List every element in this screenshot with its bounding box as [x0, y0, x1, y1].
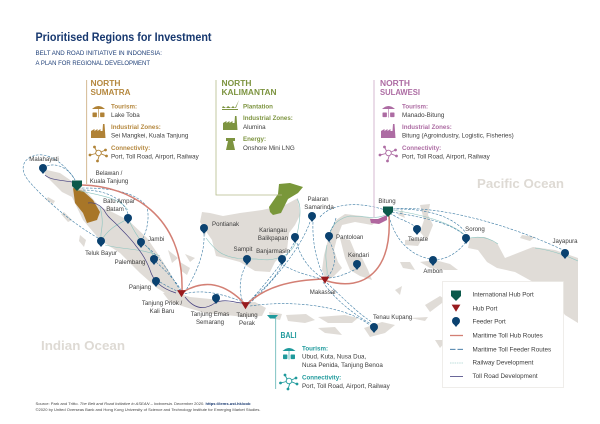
- text: North Sumatra details: Connectivity:: [111, 145, 150, 152]
- text: North Kalimantan details: [243, 104, 295, 152]
- text: North Sulawesi details: Port, Toll Road, Airport, Railway: [402, 154, 491, 160]
- text: North Kalimantan details: Onshore Mini LNG: [243, 145, 295, 152]
- source note: [36, 401, 260, 412]
- panel: North Kalimantan: [216, 79, 282, 195]
- heading: North Kalimantan: NORTH: [222, 79, 252, 88]
- map: land masses: [40, 167, 578, 348]
- heading: North Sulawesi: NORTH: [380, 79, 410, 88]
- port labels: Pantoloan: [336, 234, 363, 241]
- legend: Maritime Toll Hub Routes: [472, 332, 543, 340]
- text: North Sulawesi details: [402, 104, 514, 160]
- port labels: Palaran: [307, 196, 329, 203]
- maritime toll feeder routes: [23, 155, 563, 326]
- text: North Sulawesi details: Manado-Bitung: [402, 112, 445, 119]
- text: Bali details: [302, 346, 391, 390]
- port labels: Temate: [408, 236, 429, 243]
- port labels: Batu Ampar: [103, 198, 135, 205]
- port labels: Batam: [106, 206, 124, 213]
- port labels: Kendari: [348, 252, 369, 259]
- heading: Bali: BALI: [280, 331, 296, 340]
- text: Bali details: Connectivity:: [302, 374, 341, 382]
- legend: Feeder Port: [472, 318, 506, 326]
- subtitle: A PLAN FOR REGIONAL DEVELOPMENT: [36, 60, 150, 67]
- heading line: Sulawesi: SULAWESI: [380, 88, 420, 97]
- port labels: Ambon: [423, 268, 443, 275]
- text: North Kalimantan details: Energy:: [243, 136, 266, 143]
- ocean label: Pacific Ocean: Pacific Ocean: [477, 176, 564, 191]
- text: Bali details: Nusa Penida, Tanjung Benoa: [302, 362, 383, 369]
- text: North Kalimantan details: Industrial Zones:: [243, 115, 293, 122]
- legend: Railway Development: [472, 360, 534, 366]
- text: North Sumatra details: Industrial Zones:: [111, 124, 161, 131]
- port labels: Sorong: [465, 226, 485, 233]
- ocean label: Indian Ocean: Indian Ocean: [41, 338, 125, 353]
- port labels: Bitung: [378, 198, 396, 205]
- icons: North Sulawesi: [379, 106, 398, 162]
- port labels: Kuala Tanjung: [90, 178, 128, 185]
- panel: North Sumatra: [87, 79, 121, 184]
- port labels: Panjang: [129, 284, 151, 291]
- source note: ©2020 by United Overseas Bank and Hong Kong University of Science and Technology Institute for Emerging Market Studies.: [36, 407, 260, 412]
- port labels: Tenau Kupang: [373, 314, 412, 321]
- port labels: Tanjung Emas: [191, 311, 229, 318]
- port labels: Sampit: [234, 246, 253, 253]
- port labels: Belawan /: [96, 170, 123, 177]
- legend: Maritime Toll Feeder Routes: [472, 346, 551, 354]
- toll road development routes: [45, 175, 243, 308]
- legend: [442, 282, 564, 388]
- hub ports: [177, 277, 329, 309]
- port labels: Balikpapan: [258, 235, 288, 242]
- text: North Sumatra details: Sei Mangkei, Kuala Tanjung: [111, 132, 189, 140]
- text: North Kalimantan details: Plantation: [243, 104, 273, 110]
- text: North Sumatra details: Port, Toll Road, Airport, Railway: [111, 154, 200, 160]
- text: North Sulawesi details: Bitung (Agroindustry, Logistic, Fisheries): [402, 132, 514, 140]
- port labels: Kariangau: [259, 227, 287, 234]
- text: Bali details: Tourism:: [302, 346, 328, 352]
- legend: Toll Road Development: [472, 373, 538, 380]
- port labels: Tanjung: [236, 312, 258, 319]
- port labels: Samarinda: [304, 204, 334, 211]
- port labels: Tanjung Priok /: [142, 300, 182, 307]
- icons: North Kalimantan: [222, 100, 239, 150]
- text: Bali details: Ubud, Kuta, Nusa Dua,: [302, 354, 367, 360]
- port labels: Jambi: [148, 236, 164, 243]
- port labels: Banjarmasin: [256, 248, 290, 255]
- panel: Bali: [276, 318, 296, 389]
- international hub ports: [72, 180, 393, 217]
- port labels: Perak: [239, 320, 256, 327]
- title: Prioritised Regions for Investment: [36, 30, 212, 44]
- icons: North Sumatra: [89, 106, 108, 162]
- port labels: Pontianak: [212, 221, 240, 228]
- railway development routes: [77, 190, 578, 275]
- icons: Bali: [279, 348, 298, 390]
- heading line: Kalimantan: KALIMANTAN: [222, 88, 277, 97]
- text: North Sulawesi details: Connectivity:: [402, 145, 441, 152]
- port labels: Malahayati: [29, 156, 59, 163]
- legend: International Hub Port: [472, 292, 534, 298]
- map: Bali region: [267, 315, 278, 318]
- map: North Sulawesi region: [370, 215, 387, 224]
- map: North Sumatra region: [73, 188, 100, 223]
- port labels: Kali Baru: [150, 308, 174, 315]
- text: North Kalimantan details: Alumina: [243, 124, 266, 131]
- text: North Sulawesi details: Industrial Zones:: [402, 124, 452, 131]
- port labels: Palembang: [115, 259, 145, 266]
- text: North Sulawesi details: Tourism:: [402, 104, 428, 110]
- port labels: Jayapura: [552, 238, 578, 245]
- text: Bali details: Port, Toll Road, Airport, Railway: [302, 383, 391, 390]
- text: North Sumatra details: Tourism:: [111, 104, 137, 110]
- port labels: Teluk Bayur: [85, 250, 117, 257]
- map: North Kalimantan region: [269, 183, 303, 215]
- heading: North Sumatra: NORTH: [90, 79, 121, 88]
- legend: Hub Port: [472, 306, 498, 312]
- maritime toll hub routes: [82, 185, 389, 304]
- feeder ports: [39, 164, 569, 333]
- port labels: Semarang: [196, 319, 224, 326]
- subtitle: BELT AND ROAD INITIATIVE IN INDONESIA:: [36, 50, 162, 57]
- port labels: Makassar: [310, 289, 336, 296]
- panel: North Sulawesi: [374, 79, 410, 218]
- text: North Sumatra details: [111, 104, 200, 160]
- text: North Sumatra details: Lake Toba: [111, 112, 140, 119]
- heading line: Sumatra: SUMATRA: [90, 88, 131, 97]
- source note: Source: Park and Tritto. The Belt and Road Initiative in ASEAN – Indonesia. December 2020. https://iems.ust.hk/oob: [36, 401, 251, 406]
- port labels: [29, 156, 578, 327]
- subtitle: [36, 50, 162, 67]
